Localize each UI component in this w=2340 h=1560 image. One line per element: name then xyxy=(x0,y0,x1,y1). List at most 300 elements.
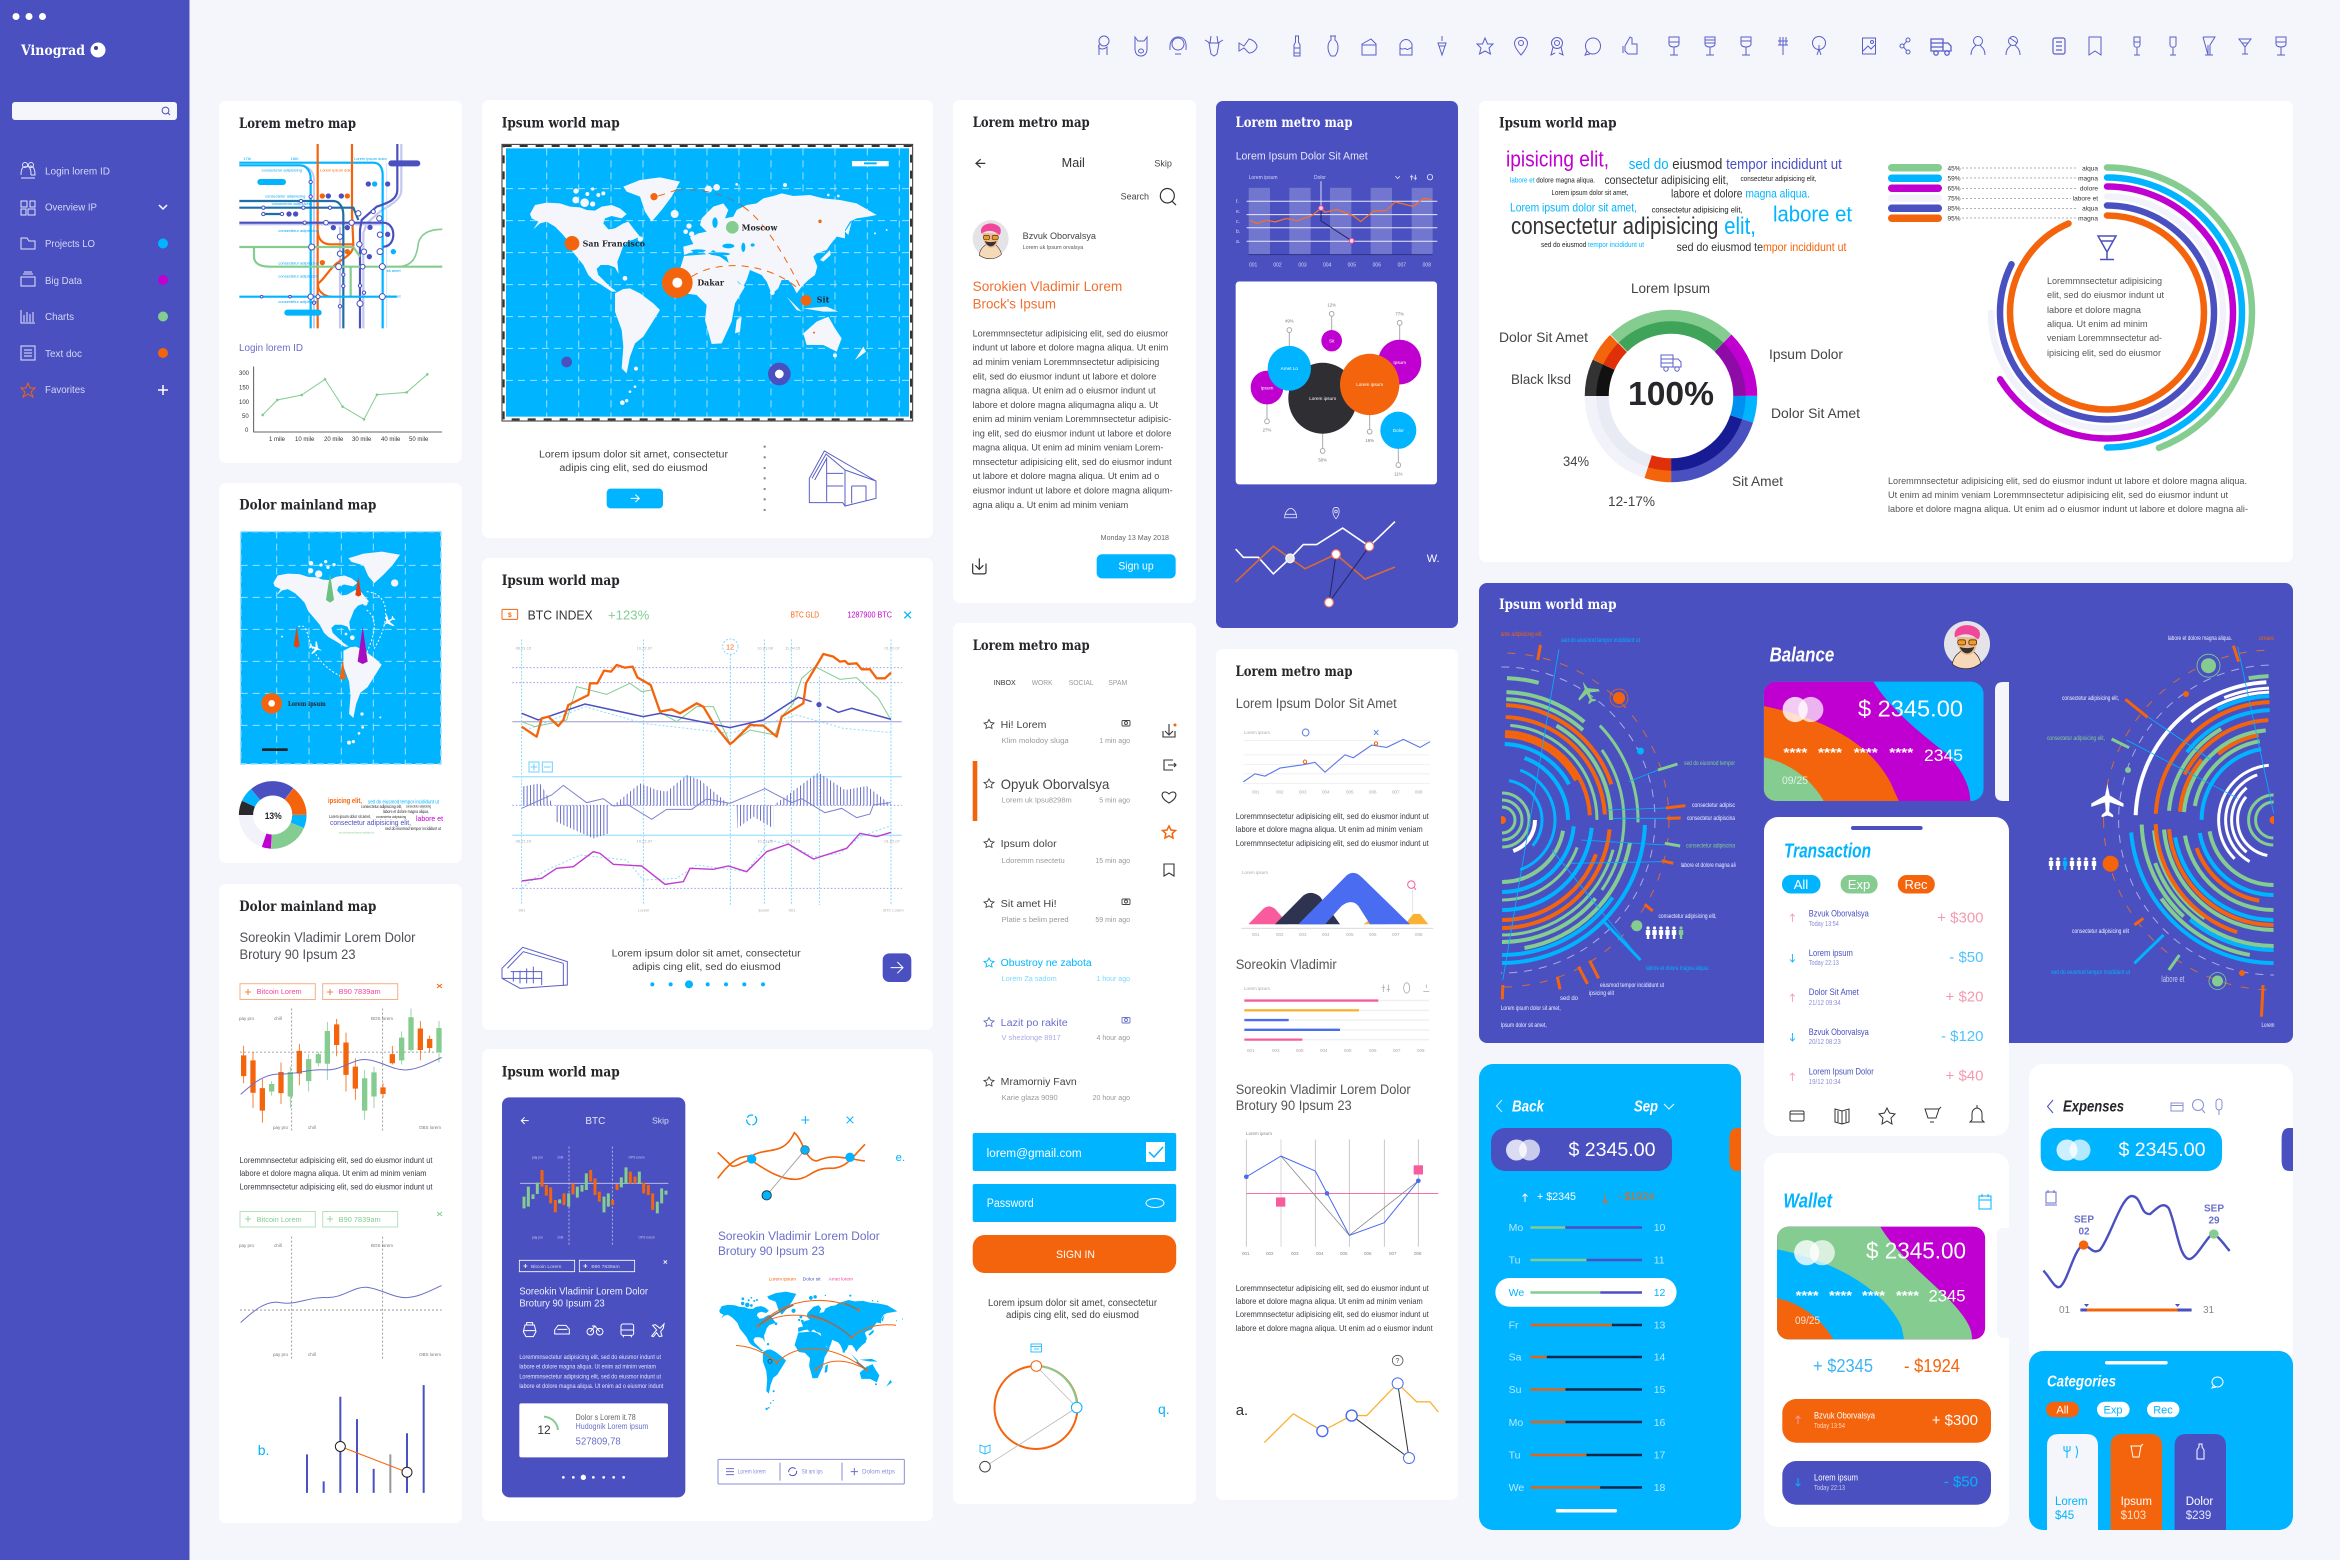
line chart: 10 mile xyxy=(295,437,315,443)
side icons xyxy=(1162,724,1176,876)
world map: Sit xyxy=(817,295,829,305)
word cloud: consectetur adipisicing elit, xyxy=(1740,176,1817,183)
balance card xyxy=(1764,682,1984,801)
caption: Lorem ipsum dolor sit amet, consectetur xyxy=(539,449,729,460)
multi line chart xyxy=(1244,1139,1438,1247)
transaction rows: Today 22:13 xyxy=(1809,960,1839,967)
heading: Dolor mainland map xyxy=(239,497,376,513)
radial text: elit, sed do eiusmor indunt ut xyxy=(2047,290,2164,301)
subheading: Soreokin Vladimir Lorem Dolor xyxy=(1236,1082,1411,1097)
donut labels: 34% xyxy=(1563,453,1589,469)
subheading: Soreokin Vladimir Lorem Dolor xyxy=(240,929,416,945)
network line chart xyxy=(1236,507,1395,607)
header: Sep xyxy=(1634,1099,1658,1116)
heading: Ipsum world map xyxy=(1499,597,1616,613)
bubble chart: 77% xyxy=(1395,312,1404,317)
transport icons xyxy=(523,1323,664,1337)
bubble chart: Lorem ipsum xyxy=(1356,382,1383,388)
paragraph: Loremmnsectetur adipisicing elit, sed do eiusmor indunt ut xyxy=(240,1155,433,1165)
right chart labels: labore et xyxy=(2161,974,2185,984)
mail header: Bzvuk Oborvalsya xyxy=(1023,231,1097,242)
radial text: labore et dolore magna xyxy=(2047,305,2142,316)
right chart labels: consectetur adipisicing elit, xyxy=(2047,735,2105,742)
caption xyxy=(539,449,729,474)
heading: Lorem metro map xyxy=(973,115,1090,131)
mail body: ad minim veniam Loremmnsectetur adipisicing xyxy=(973,357,1159,367)
area chart labels: 007 xyxy=(1392,932,1400,937)
tags: green: Bitcoin Lorem xyxy=(257,1217,302,1224)
transaction rows: 21/12 09:34 xyxy=(1809,1000,1841,1007)
chart labels: 10.03.08 xyxy=(757,645,774,650)
next card peek xyxy=(1997,1228,2009,1338)
radial legend: 95% xyxy=(1948,216,1961,222)
phone mockup: Dolor s Lorem it.78 xyxy=(576,1413,636,1422)
menu items: Text doc xyxy=(45,348,82,360)
world map: Dakar xyxy=(697,278,725,288)
paragraph: labore et dolore magna aliqua. Ut enim ad minim veniam xyxy=(1236,824,1423,834)
day labels: Sa xyxy=(1509,1352,1522,1364)
radial legend xyxy=(1888,164,2098,222)
left chart labels: sed do eiusmod tempor xyxy=(1684,760,1736,767)
donut centre value: 100% xyxy=(1628,375,1714,412)
metro lines xyxy=(239,144,442,328)
phone mockup: B90 7839am xyxy=(591,1264,620,1270)
paragraph: Loremmnsectetur adipisicing elit, sed do eiusmor indunt ut xyxy=(1236,1309,1429,1319)
paragraph xyxy=(240,1155,433,1192)
line chart: 1 mile xyxy=(269,437,286,443)
top icon row xyxy=(1099,36,2286,56)
striped line chart: 004 xyxy=(1323,262,1332,268)
radial legend: alqua xyxy=(2082,206,2098,212)
trend labels: OBS lorem xyxy=(419,1352,441,1357)
phone mockup: BTC xyxy=(585,1116,605,1127)
menu items: Projects LO xyxy=(45,238,95,250)
mail header: Lorem uk Ipsum orvalsya xyxy=(1023,245,1084,251)
message list: Obustroy ne zabota xyxy=(1001,958,1092,969)
left chart labels xyxy=(1501,631,1736,1029)
transaction rows: Lorem ipsum xyxy=(1809,948,1853,958)
day labels: 14 xyxy=(1654,1352,1666,1364)
paragraph: labore et dolore magna aliqua. Ut enim ad o eiusmor indunt xyxy=(1236,1323,1433,1333)
phone mockup: chill xyxy=(557,1235,563,1239)
filter pills: Exp xyxy=(1848,877,1870,892)
panel: light charts xyxy=(1216,649,1458,1500)
icon: image xyxy=(1862,38,1876,54)
legend: Lorem ipsum xyxy=(769,1277,796,1282)
chart axis labels: 002 xyxy=(1276,790,1284,794)
radial legend: 85% xyxy=(1948,206,1961,212)
chart labels: 01.02.07 xyxy=(884,839,901,844)
highlighted day xyxy=(1495,1278,1676,1307)
caption: adipis cing elit, sed do eiusmod xyxy=(559,463,708,474)
balance heading: Balance xyxy=(1770,645,1834,667)
word cloud: consectetur adipisicing xyxy=(406,804,431,808)
donut labels xyxy=(1499,280,1860,509)
subheading: Soreokin Vladimir xyxy=(1236,957,1337,972)
striped line chart: e. xyxy=(1236,209,1240,215)
heading: Dolor mainland map xyxy=(239,899,376,915)
right chart labels xyxy=(2047,635,2274,1029)
btc chart xyxy=(512,639,902,905)
message list: Ipsum dolor xyxy=(1001,839,1057,850)
line chart: 0 xyxy=(245,428,249,434)
right chart labels: Lorem xyxy=(2262,1022,2274,1029)
circle diagram xyxy=(980,1344,1082,1472)
bubble chart xyxy=(1236,281,1437,484)
panel: dolor mainland candlesticks xyxy=(219,884,462,1523)
icon: user xyxy=(2006,36,2020,55)
word cloud: ipsicing elit, xyxy=(328,796,362,805)
network chart xyxy=(1264,1355,1438,1464)
index header: +123% xyxy=(608,607,649,622)
word cloud: sed do eiusmod tempor incididunt ut xyxy=(1676,240,1847,254)
word cloud: consectetur adipisicing xyxy=(376,815,406,819)
totals: - $1924 xyxy=(1618,1191,1654,1203)
radial legend: 45% xyxy=(1948,166,1961,172)
day labels: 15 xyxy=(1654,1384,1666,1396)
logo: Vinograd xyxy=(20,43,86,59)
mail header xyxy=(973,155,1176,259)
icon: bottle xyxy=(1294,36,1300,56)
left chart labels: ipsicing elit xyxy=(1589,990,1614,997)
trend labels: chill xyxy=(308,1352,316,1357)
header xyxy=(1496,1099,1674,1116)
area chart labels: 005 xyxy=(1346,932,1354,937)
striped line chart: a. xyxy=(1236,239,1240,245)
heading: Transaction xyxy=(1784,841,1871,863)
chart axis labels: 005 xyxy=(1346,790,1354,794)
left chart labels: consectetur adipiscina xyxy=(1686,843,1735,850)
area chart labels: 002 xyxy=(1276,932,1284,937)
paragraph: Loremmnsectetur adipisicing elit, sed do eiusmor indunt ut xyxy=(240,1182,433,1192)
bubble chart: Ipsum xyxy=(1393,360,1406,366)
chart labels: pay pro xyxy=(239,1016,255,1021)
trend labels: BOS lorem xyxy=(371,1243,393,1248)
metro labels xyxy=(243,156,420,316)
phone mockup: Soreokin Vladimir Lorem Dolor xyxy=(519,1287,649,1298)
totals xyxy=(1813,1356,1960,1376)
category cards: Ipsum xyxy=(2121,1496,2152,1508)
wallet card: $ 2345.00 xyxy=(1866,1238,1966,1264)
multi line labels: 004 xyxy=(1316,1251,1324,1256)
header xyxy=(2048,1099,2222,1116)
donut labels: Dolor Sit Amet xyxy=(1771,405,1860,421)
icon: note xyxy=(2053,38,2065,54)
area chart labels xyxy=(1242,870,1423,937)
radial bar chart xyxy=(1962,168,2252,458)
mail title xyxy=(973,279,1122,311)
radial text: ipisicing elit, sed do eiusmor xyxy=(2047,348,2161,359)
day labels: 18 xyxy=(1654,1482,1666,1494)
radial text: Loremmnsectetur adipisicing xyxy=(2047,276,2162,287)
metro labels: consectetur adipisicing xyxy=(265,193,305,198)
balance pill: $ 2345.00 xyxy=(2118,1140,2206,1161)
index header: BTC INDEX xyxy=(528,607,593,622)
tab bar: Dolom ettps xyxy=(862,1470,895,1476)
icon: cake xyxy=(1400,40,1412,55)
tags: green xyxy=(240,1212,442,1227)
balance card: **** xyxy=(1889,745,1914,760)
chart labels: 12 xyxy=(726,642,734,651)
indigo transaction: Lorem ipsum xyxy=(1814,1473,1858,1483)
icon: thumb xyxy=(1623,37,1637,54)
caption: adipis cing elit, sed do eiusmod xyxy=(632,962,781,973)
icon: martini xyxy=(2203,37,2215,55)
chart heading: Soreokin Vladimir Lorem Dolor xyxy=(718,1229,880,1243)
heading: Lorem metro map xyxy=(1236,664,1352,680)
heading: Lorem metro map xyxy=(1236,115,1352,131)
icon: user xyxy=(1971,36,1985,55)
panel: mail xyxy=(953,100,1196,603)
login form: SIGN IN xyxy=(1056,1249,1095,1261)
radial text xyxy=(2047,276,2164,359)
area chart labels: 001 xyxy=(1252,932,1260,937)
help mark: ? xyxy=(1396,1358,1400,1365)
chart axis labels: 001 xyxy=(1252,790,1260,794)
word cloud: consectetur adipisicing elit, xyxy=(330,818,411,827)
metro labels: consectetur adipisicing xyxy=(278,261,319,266)
subheading: Lorem Ipsum Dolor Sit Amet xyxy=(1236,150,1368,162)
left chart labels: sed do eiusmod tempor incididunt ut xyxy=(1561,637,1640,644)
balance card: 09/25 xyxy=(1782,775,1808,787)
transaction rows: Bzvuk Oborvalsya xyxy=(1809,909,1869,919)
icon: pin xyxy=(1515,37,1527,55)
mail body: Loremmnsectetur adipisicing elit, sed do eiusmor xyxy=(973,328,1168,339)
metro stations xyxy=(260,180,385,308)
transaction rows: Today 13:54 xyxy=(1809,921,1839,928)
donut labels: Dolor Sit Amet xyxy=(1499,329,1588,345)
wallet card xyxy=(1777,1227,1985,1339)
paragraph: Loremmnsectetur adipisicing elit, sed do eiusmor indunt ut xyxy=(1236,1283,1429,1293)
balance card: 2345 xyxy=(1924,746,1963,765)
paragraph: Loremmnsectetur adipisicing elit, sed do eiusmor indunt ut xyxy=(1236,811,1429,821)
tags: green: B90 7839am xyxy=(339,1217,381,1224)
word cloud: consectetur adipisicing elit, xyxy=(1604,173,1728,187)
trend labels xyxy=(239,1243,441,1357)
left chart labels: labore et dolore magna ali xyxy=(1681,862,1736,869)
message list: Ldoremm nsectetu xyxy=(1002,858,1065,865)
horizontal bars xyxy=(1244,983,1429,1040)
striped line chart: 003 xyxy=(1298,262,1307,268)
line chart: 150 xyxy=(239,386,250,392)
link label: Login lorem ID xyxy=(239,342,303,354)
day labels xyxy=(1509,1222,1666,1494)
metro labels: consectetur adipisicing xyxy=(272,201,312,206)
bubble chart: 12% xyxy=(1327,302,1336,307)
menu items: Favorites xyxy=(45,384,85,396)
radial legend: dolore xyxy=(2080,186,2098,192)
caption: Lorem ipsum dolor sit amet, consectetur xyxy=(988,1298,1158,1309)
mail title: Sorokien Vladimir Lorem xyxy=(973,279,1122,294)
panel: indigo radial dashboards xyxy=(1479,583,2293,1043)
chart axis labels: 006 xyxy=(1369,790,1377,794)
wallet card: **** xyxy=(1896,1288,1920,1303)
icon: goblet xyxy=(2276,37,2286,55)
striped line chart: b. xyxy=(1236,229,1240,235)
icon: truck xyxy=(1661,355,1681,371)
donut labels: Ipsum Dolor xyxy=(1769,346,1843,362)
curve labels: SEP xyxy=(2204,1204,2224,1215)
transaction rows: - $50 xyxy=(1949,949,1984,966)
message list: Lazit po rakite xyxy=(1001,1018,1068,1029)
striped line chart xyxy=(1236,174,1437,268)
icon: bookmark xyxy=(2089,37,2101,55)
panel: world map with phone xyxy=(482,1049,933,1521)
phone mockup: Loremmnsectetur adipisicing elit, sed do eiusmor indunt ut xyxy=(519,1374,661,1380)
striped line chart: 002 xyxy=(1273,262,1282,268)
area chart labels: 006 xyxy=(1369,932,1377,937)
curve labels: 02 xyxy=(2078,1227,2090,1238)
left chart markers xyxy=(1573,677,1683,939)
tab bar: Lorem lorem xyxy=(738,1470,766,1476)
category cards: Lorem xyxy=(2055,1496,2088,1508)
phone mockup: pay pro xyxy=(532,1235,543,1239)
phone mockup: 12 xyxy=(537,1423,551,1437)
orange transaction xyxy=(1782,1399,1991,1443)
letter mark: b. xyxy=(258,1442,269,1458)
menu markers xyxy=(158,205,168,395)
phone mockup: labore et dolore magna aliqua. Ut enim ad o eiusmor indunt xyxy=(519,1384,664,1390)
bubble chart: Sit xyxy=(1329,338,1335,344)
paragraph xyxy=(1236,1283,1433,1333)
heading: Wallet xyxy=(1783,1191,1833,1213)
chart labels: 10.03.08 xyxy=(757,839,774,844)
metro labels: Lorem ipsum dolor xyxy=(354,156,388,161)
bar labels xyxy=(1244,986,1425,1053)
mail header: Search xyxy=(1121,191,1149,202)
bar labels: 007 xyxy=(1393,1048,1401,1053)
line chart: 20 mile xyxy=(324,437,344,443)
icon: girl xyxy=(1170,37,1186,54)
left chart labels: labore et dolore magna aliqua. xyxy=(1646,965,1709,972)
curve chart: e. xyxy=(896,1152,905,1164)
icon: cheese xyxy=(1362,39,1376,55)
bar labels: 003 xyxy=(1272,1048,1280,1053)
chart labels: 01.02.07 xyxy=(884,645,901,650)
orange transaction: Today 13:54 xyxy=(1814,1423,1845,1430)
tab bar xyxy=(718,1459,904,1484)
icon: martini xyxy=(2239,39,2251,54)
pagination xyxy=(650,980,765,988)
americas map xyxy=(241,532,441,764)
right chart markers xyxy=(2049,654,2245,990)
tabs xyxy=(994,678,1127,687)
icon: martini xyxy=(2098,236,2116,260)
right chart labels: labore et dolore magna aliqua. xyxy=(2168,635,2232,642)
right chart labels: ornare xyxy=(2259,635,2274,642)
bubble chart: 11% xyxy=(1394,471,1403,476)
mail body: magna aliqua. Ut enim ad minim veniam Lorem- xyxy=(973,442,1163,453)
curve labels xyxy=(2074,1204,2224,1238)
day labels: We xyxy=(1509,1482,1524,1494)
donut chart: 13% xyxy=(265,811,282,821)
letter mark: W. xyxy=(1427,553,1440,565)
wallet card: **** xyxy=(1829,1288,1853,1303)
donut labels: 12-17% xyxy=(1608,493,1655,509)
chart labels: ipsum xyxy=(759,907,770,912)
line chart: 30 mile xyxy=(352,437,372,443)
panel: transaction xyxy=(1764,817,2009,1136)
button xyxy=(607,489,663,508)
phone mockup: OPS lorem xyxy=(628,1155,645,1159)
caption: Lorem ipsum dolor sit amet, consectetur xyxy=(612,949,801,960)
icon: wine glass xyxy=(1705,37,1715,55)
multi line labels: 003 xyxy=(1291,1251,1299,1256)
icon: grapes xyxy=(1438,36,1446,55)
icon: truck xyxy=(1931,39,1951,55)
login form xyxy=(973,1133,1176,1273)
bubble chart: 49% xyxy=(1285,318,1294,323)
icon: chat xyxy=(1585,38,1600,55)
panel: indigo metro charts xyxy=(1216,101,1458,628)
index header: BTC GLD xyxy=(791,611,819,620)
balance card xyxy=(519,1403,668,1457)
ring donut chart xyxy=(1558,283,1784,509)
multi line labels: 008 xyxy=(1414,1251,1422,1256)
day labels: Mo xyxy=(1509,1417,1523,1429)
chart axis labels xyxy=(1244,730,1423,794)
word cloud: consectetur adipisicing elit, xyxy=(1652,206,1743,215)
metro labels: Lorem ipsum dolor xyxy=(320,167,354,172)
paragraph: Loremmnsectetur adipisicing elit, sed do eiusmor indunt ut xyxy=(1236,838,1429,848)
left radial ticks xyxy=(1502,645,1685,999)
phone mockup: Hudognik Lorem ipsum xyxy=(576,1422,649,1431)
mail body: elit, sed do eiusmor indunt ut labore et dolore xyxy=(973,371,1156,381)
phone mockup: 527809,78 xyxy=(576,1437,621,1448)
balance card: **** xyxy=(1818,745,1843,760)
curve labels: 29 xyxy=(2208,1216,2220,1227)
bar labels: 006 xyxy=(1369,1048,1377,1053)
bubble chart: Lorem ipsum xyxy=(1309,396,1336,402)
category cards: $239 xyxy=(2186,1510,2211,1522)
header: Back xyxy=(1512,1099,1545,1116)
tabs: SPAM xyxy=(1108,678,1127,687)
left chart labels: eiusmod tempor incididunt ut xyxy=(1600,982,1664,989)
panel: infographic top right xyxy=(1479,101,2293,562)
message list xyxy=(1001,720,1130,1102)
spend curve xyxy=(2043,1196,2230,1287)
tabs: INBOX xyxy=(994,678,1016,687)
phone mockup: chill xyxy=(557,1155,563,1159)
transaction rows xyxy=(1790,909,1984,1086)
message list: 20 hour ago xyxy=(1093,1095,1130,1102)
multi line labels: Lorem ipsum xyxy=(1246,1131,1272,1136)
caption xyxy=(988,1298,1158,1321)
message list: 59 min ago xyxy=(1095,917,1130,924)
balance pill: $ 2345.00 xyxy=(1568,1140,1656,1161)
category cards: $103 xyxy=(2121,1510,2146,1522)
wallet card: **** xyxy=(1796,1288,1820,1303)
tab bar: Sit am ips xyxy=(802,1470,823,1476)
bubble chart: Dolor xyxy=(1393,428,1404,434)
left chart labels: Ipsum dolor sit amet, xyxy=(1501,1022,1547,1029)
word cloud: labore et dolore magna aliqua, xyxy=(383,809,429,814)
mail body: labore et dolore magna aliqumagna aliqu a. Ut xyxy=(973,400,1159,410)
chart labels: pay pro xyxy=(273,1125,289,1130)
chart axis labels: 008 xyxy=(1415,790,1423,794)
chart heading xyxy=(718,1229,880,1258)
phone mockup: Loremmnsectetur adipisicing elit, sed do eiusmor indunt ut xyxy=(519,1355,661,1361)
bar labels: 001 xyxy=(1247,1048,1255,1053)
heading: Lorem metro map xyxy=(973,638,1090,654)
heading: Ipsum world map xyxy=(502,116,620,132)
striped line chart: Dolor xyxy=(1314,175,1326,181)
mail header: Skip xyxy=(1154,158,1172,168)
balance card: **** xyxy=(1783,745,1808,760)
heading: Categories xyxy=(2047,1374,2116,1391)
tags: bitcoin: Bitcoin Lorem xyxy=(257,989,302,996)
paragraph: labore et dolore magna aliqua. Ut enim ad o eiusmor indunt ut labore et dolore magna ali- xyxy=(1888,504,2248,515)
